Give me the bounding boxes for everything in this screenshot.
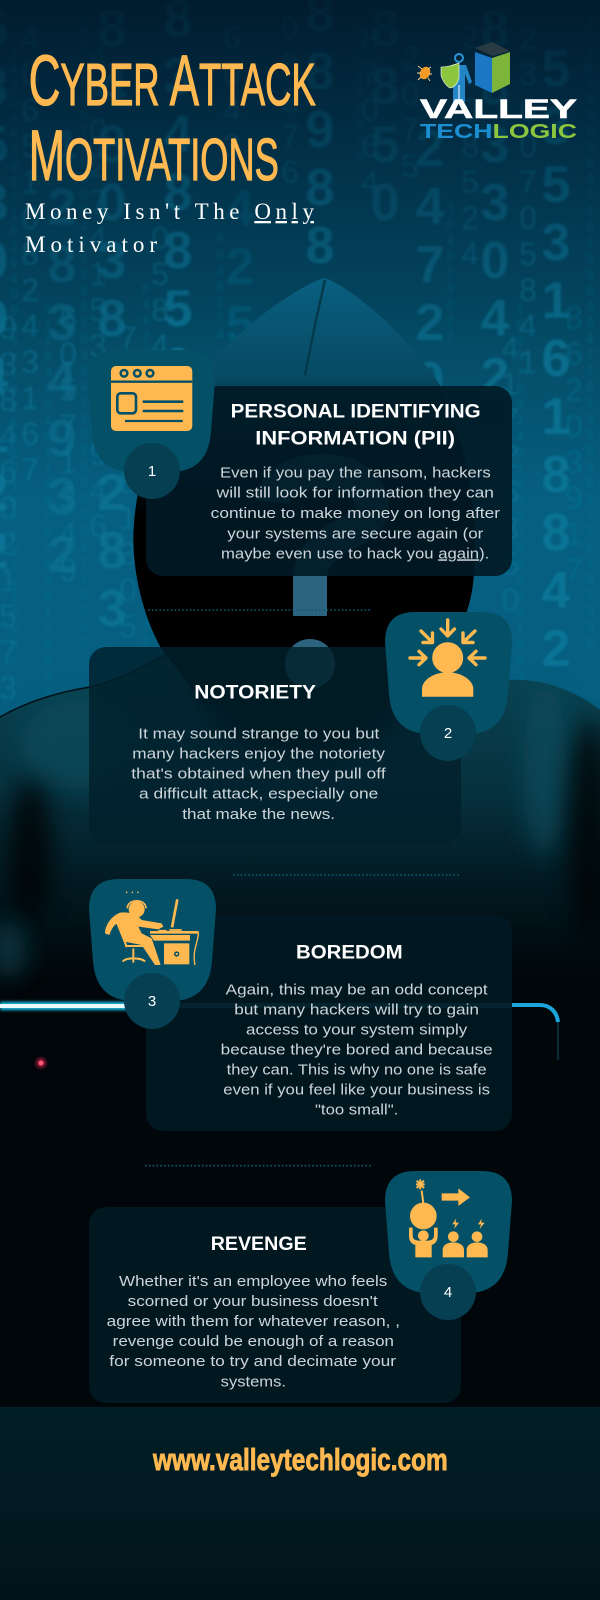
background: falling number columns: 2075 <box>392 40 428 184</box>
subtitle: Motivator <box>25 232 157 257</box>
red indicator light <box>36 1058 46 1068</box>
left shoulder highlight <box>20 700 140 790</box>
background: falling number columns: 6043 <box>214 20 250 164</box>
laptop edge glow line <box>0 1002 558 1060</box>
background: falling number columns: 3904718265039471826503947182650394718265 <box>76 10 92 650</box>
background: falling number columns: 2608524 <box>452 20 488 272</box>
icon: person bored at desk <box>105 891 198 965</box>
background: falling number columns: 5353161884217 <box>527 40 585 794</box>
panel 4 body text: revenge could be enough of a reason <box>113 1333 394 1350</box>
panel 3 body text: access to your system simply <box>246 1021 468 1038</box>
background: falling number columns: 42834932 <box>33 120 91 584</box>
panel 1 body text: will still look for information they can <box>216 484 494 502</box>
panel 4 heading: REVENGE <box>211 1233 307 1255</box>
number badge 2: 2 <box>444 725 452 742</box>
logo: wordmark VALLEY: VALLEY <box>420 94 577 124</box>
panel 3: boredom <box>146 915 512 1131</box>
background: dark blue gradient <box>0 0 600 1000</box>
panel 3 heading: BOREDOM <box>296 942 403 964</box>
background: falling number columns: 4256 <box>211 180 269 412</box>
subtitle: Money Isn't The Only <box>25 199 314 224</box>
panel 2: notoriety <box>89 647 461 844</box>
panel 3 body text: "too small". <box>315 1101 398 1118</box>
hood seam <box>305 280 325 375</box>
panel 1 body text: Even if you pay the ransom, hackers <box>220 464 491 481</box>
subtitle <box>25 199 314 257</box>
panel 2 body text: that make the news. <box>182 806 335 823</box>
shoulders <box>0 650 600 1000</box>
panel 2 heading: NOTORIETY <box>194 682 316 704</box>
background: falling number columns: 48027415382946 <box>80 40 116 544</box>
panel 4 body text <box>107 1273 400 1391</box>
shoulder crease <box>0 655 165 717</box>
panel 3 body text: Again, this may be an odd concept <box>226 981 489 998</box>
hacker silhouette <box>0 278 600 1000</box>
panel 4 card <box>89 1207 461 1403</box>
background: falling number columns: 64820175396482017539648201753964 <box>138 280 154 792</box>
background: falling number columns: 2472068 <box>401 120 459 526</box>
panel 3 body text: they can. This is why no one is safe <box>227 1061 487 1078</box>
background: falling number columns: 60571349 <box>50 300 86 588</box>
panel 3 card <box>146 915 512 1131</box>
panel 2 body text: It may sound strange to you but <box>138 725 380 742</box>
panel 1 card <box>146 386 512 576</box>
number badge 3: 3 <box>148 993 156 1010</box>
panel 2 card <box>89 647 461 844</box>
panel 4 icon tile <box>385 1171 512 1320</box>
panel 3 body text <box>221 981 493 1118</box>
number badge 3 <box>124 973 180 1029</box>
panel 2 body text: that's obtained when they pull off <box>131 765 387 782</box>
background: falling number columns: 08276 <box>272 10 308 190</box>
logo: cube <box>475 42 510 93</box>
background: falling number columns: 364819027 <box>442 200 458 344</box>
background: falling number columns: 8833042 <box>466 0 524 406</box>
logo: bug <box>417 65 432 81</box>
panel 1: personal identifying information <box>146 386 512 576</box>
background: falling number columns: 180375924618037592461803 <box>512 300 528 684</box>
panel 2 icon tile <box>385 612 512 761</box>
logo: Valley Techlogic <box>417 42 577 143</box>
dotted divider 2 <box>233 874 459 876</box>
question mark <box>272 471 372 689</box>
face shadow <box>185 540 425 760</box>
panel 1 body text: continue to make money on long after <box>211 505 500 522</box>
number badge 2 <box>420 705 476 761</box>
hood <box>133 278 475 705</box>
panel 4: revenge <box>89 1207 461 1403</box>
dotted divider 3 <box>145 1165 372 1167</box>
panel 1 icon tile <box>88 350 215 499</box>
background: falling number columns: 9036174 <box>212 230 228 342</box>
panel 2 body text <box>131 725 387 823</box>
icon: person with arrows pointing in <box>410 620 485 697</box>
panel 3 icon tile <box>89 879 216 1029</box>
panel 3 body text: because they're bored and because <box>221 1041 493 1058</box>
background: falling number columns: 8348850694 <box>149 0 207 570</box>
title: MOTIVATIONS <box>29 117 279 196</box>
right shoulder highlight <box>523 685 567 855</box>
panel 1 heading <box>231 401 481 449</box>
number badge 1 <box>124 443 180 499</box>
number badge 1: 1 <box>148 463 156 480</box>
number badge 4: 4 <box>444 1284 452 1301</box>
title <box>29 42 316 196</box>
background: top darkening <box>0 0 600 340</box>
floor band <box>0 1407 600 1600</box>
background: falling number columns: 41726350 <box>492 330 528 618</box>
panel 4 body text: agree with them for whatever reason, , <box>107 1313 400 1330</box>
right shoulder shadow <box>568 720 600 940</box>
panel 2 body text: a difficult attack, especially one <box>139 785 378 802</box>
panel 4 body text: scorned or your business doesn't <box>128 1293 379 1310</box>
lower dark background <box>0 980 600 1410</box>
panel 2 body text: many hackers enjoy the notoriety <box>132 745 386 762</box>
background: falling number columns: 5129360481759203648175920364 <box>40 300 56 748</box>
background: falling number columns: 7264813059 <box>110 320 146 680</box>
left arm glow <box>0 922 26 978</box>
background: falling number columns: 728105639 <box>352 20 368 164</box>
left shoulder shadow <box>8 780 52 920</box>
background: falling number columns: 2360705841 <box>510 20 546 380</box>
panel 1 heading: INFORMATION (PII) <box>255 427 455 449</box>
title: CYBER ATTACK <box>29 42 316 121</box>
panel 4 body text: for someone to try and decimate your <box>109 1353 396 1370</box>
background: falling number columns: 4065108243167 <box>12 20 48 488</box>
panel 1 body text: your systems are secure again (or <box>227 525 483 542</box>
panel 3 body text: even if you feel like your business is <box>223 1081 490 1098</box>
panel 1 body text: maybe even use to hack you again ). <box>221 545 489 562</box>
background: falling number columns <box>0 0 598 794</box>
panel 1 heading: PERSONAL IDENTIFYING <box>231 401 481 423</box>
background: falling number columns: 4726195038472619503847261950384726195038 <box>582 10 598 650</box>
panel 3 body text: but many hackers will try to gain <box>234 1001 479 1018</box>
background: falling number columns: 7182046395718264093571826409357182640935 <box>6 30 22 670</box>
logo: wordmark TECHLOGIC: TECH LOGIC <box>420 121 577 143</box>
background: falling number columns: 0584312 <box>142 220 178 472</box>
background: falling number columns: 86203917 <box>556 300 592 588</box>
website url: www.valleytechlogic.com <box>152 1442 448 1477</box>
icon: bomb, arrow and people <box>409 1179 488 1257</box>
background: falling number columns: 84803841283 <box>83 0 141 638</box>
number badge 4 <box>420 1264 476 1320</box>
logo: person with shield <box>441 54 472 102</box>
panel 4 body text: systems. <box>221 1374 286 1391</box>
icon: browser window <box>111 366 192 431</box>
background: falling number columns: 87064 <box>352 20 388 200</box>
background: falling number columns: 8850 <box>356 0 414 232</box>
panel 4 body text: Whether it's an employee who feels <box>119 1273 387 1290</box>
panel 1 body text <box>211 464 500 562</box>
dotted divider 1 <box>148 609 372 611</box>
